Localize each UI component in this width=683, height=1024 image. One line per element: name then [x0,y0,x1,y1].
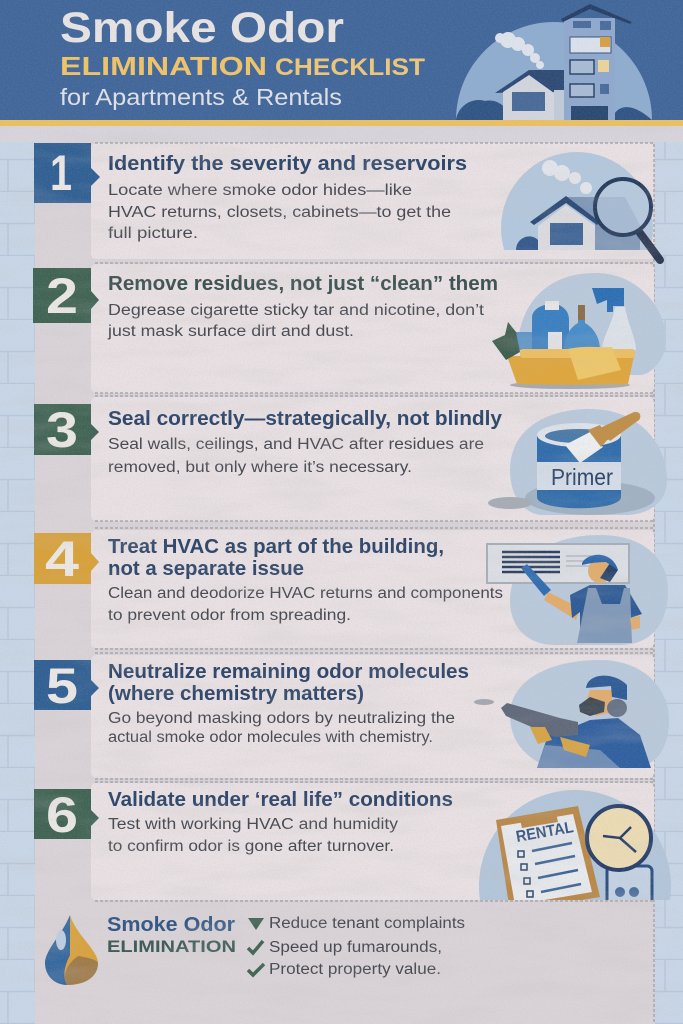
checklist items: Protect property value. [269,961,441,978]
text: step 6 body: Test with working HVAC and humidity [108,816,398,833]
icon: technician cleaning HVAC vent [487,535,668,645]
checklist items: Speed up fumarounds, [269,939,442,956]
subtitle: Elimination Checklist: ELIMINATION [60,51,267,81]
icon: worker spraying with respirator [474,660,669,768]
heading: step 5 [108,661,469,705]
badge: number 5: 5 [46,658,78,714]
text: step 5 body: Go beyond masking odors by neutralizing the [108,710,455,727]
icon: house and apartment building [456,4,652,120]
panel: step 1 [34,143,660,1024]
heading: step 4 [108,536,444,580]
icon: rental clipboard, clock and thermostat [479,790,671,900]
text: step 1 body: HVAC returns, closets, cabinets—to get the [108,204,451,221]
heading: step 5: Neutralize remaining odor molecules [108,661,469,683]
gold divider strip [0,120,683,126]
badge: number 6 [34,787,99,843]
badge: number 3 [34,402,99,458]
text: step 6 body: to confirm odor is gone after turnover. [108,838,394,855]
label: Primer: Primer [551,464,613,490]
heading: step 2: Remove residues, not just “clean” them [108,273,498,295]
icon: primer paint can and brush [488,409,667,515]
footer brand: Smoke Odor [107,914,235,936]
text: step 5 body [108,710,455,746]
text: step 1 body [108,182,451,242]
panel: step 3 [34,396,667,521]
icon: two-tone droplet [45,915,98,985]
title: Smoke Odor: Smoke Odor [60,4,344,52]
text: step 3 body: removed, but only where it’s necessary. [108,459,412,476]
panel: step 2 [33,263,666,393]
panel: step 5 [34,653,669,779]
text: step 3 body [108,436,484,476]
text: step 2 body [107,302,485,340]
badge: number 4: 4 [45,531,79,587]
text: step 2 body: just mask surface dirt and dust. [107,323,354,340]
badge: number 1: 1 [50,145,72,201]
text: step 3 body: Seal walls, ceilings, and HVAC after residues are [108,436,484,453]
badge: number 1 [34,143,100,203]
badge: number 4 [34,531,99,587]
icon: cleaning supplies basket [492,273,666,389]
badge: number 5 [34,658,99,714]
text: step 4 body: Clean and deodorize HVAC returns and components [108,585,503,602]
text: step 4 body [108,585,503,624]
badge: number 3: 3 [46,402,78,458]
text: step 1 body: full picture. [108,225,198,242]
badge: number 2: 2 [46,268,78,324]
badge: number 6: 6 [46,787,78,843]
text: step 6 body [108,816,398,855]
heading: step 4: not a separate issue [108,558,304,580]
text: step 5 body: actual smoke odor molecules with chemistry. [108,729,433,746]
checklist items: Reduce tenant complaints [269,915,465,932]
text: step 1 body: Locate where smoke odor hides—like [108,182,412,199]
header band [0,0,683,120]
footer brand [107,914,236,956]
checklist items [248,915,465,978]
heading: step 3: Seal correctly—strategically, not blindly [108,408,503,430]
heading: step 1: Identify the severity and reservoirs [108,153,467,175]
badge: number 2 [33,268,99,324]
panel: step 4 [34,528,668,649]
subtitle: Elimination Checklist: CHECKLIST [275,54,425,81]
panel: step 6 [34,782,671,902]
text: step 2 body: Degrease cigarette sticky tar and nicotine, don’t [108,302,485,319]
heading: step 5: (where chemistry matters) [108,683,364,705]
subtitle: Elimination Checklist [60,51,425,81]
footer: benefits [45,914,465,985]
subtitle: for Apartments and Rentals: for Apartments & Rentals [60,84,342,110]
footer brand: ELIMINATION [107,937,236,956]
heading: step 4: Treat HVAC as part of the building, [108,536,444,558]
text: step 4 body: to prevent odor from spreading. [108,607,351,624]
heading: step 6: Validate under ‘real life” conditions [108,789,453,811]
label: RENTAL: RENTAL [515,819,575,846]
icon: house under magnifying glass [501,152,664,264]
